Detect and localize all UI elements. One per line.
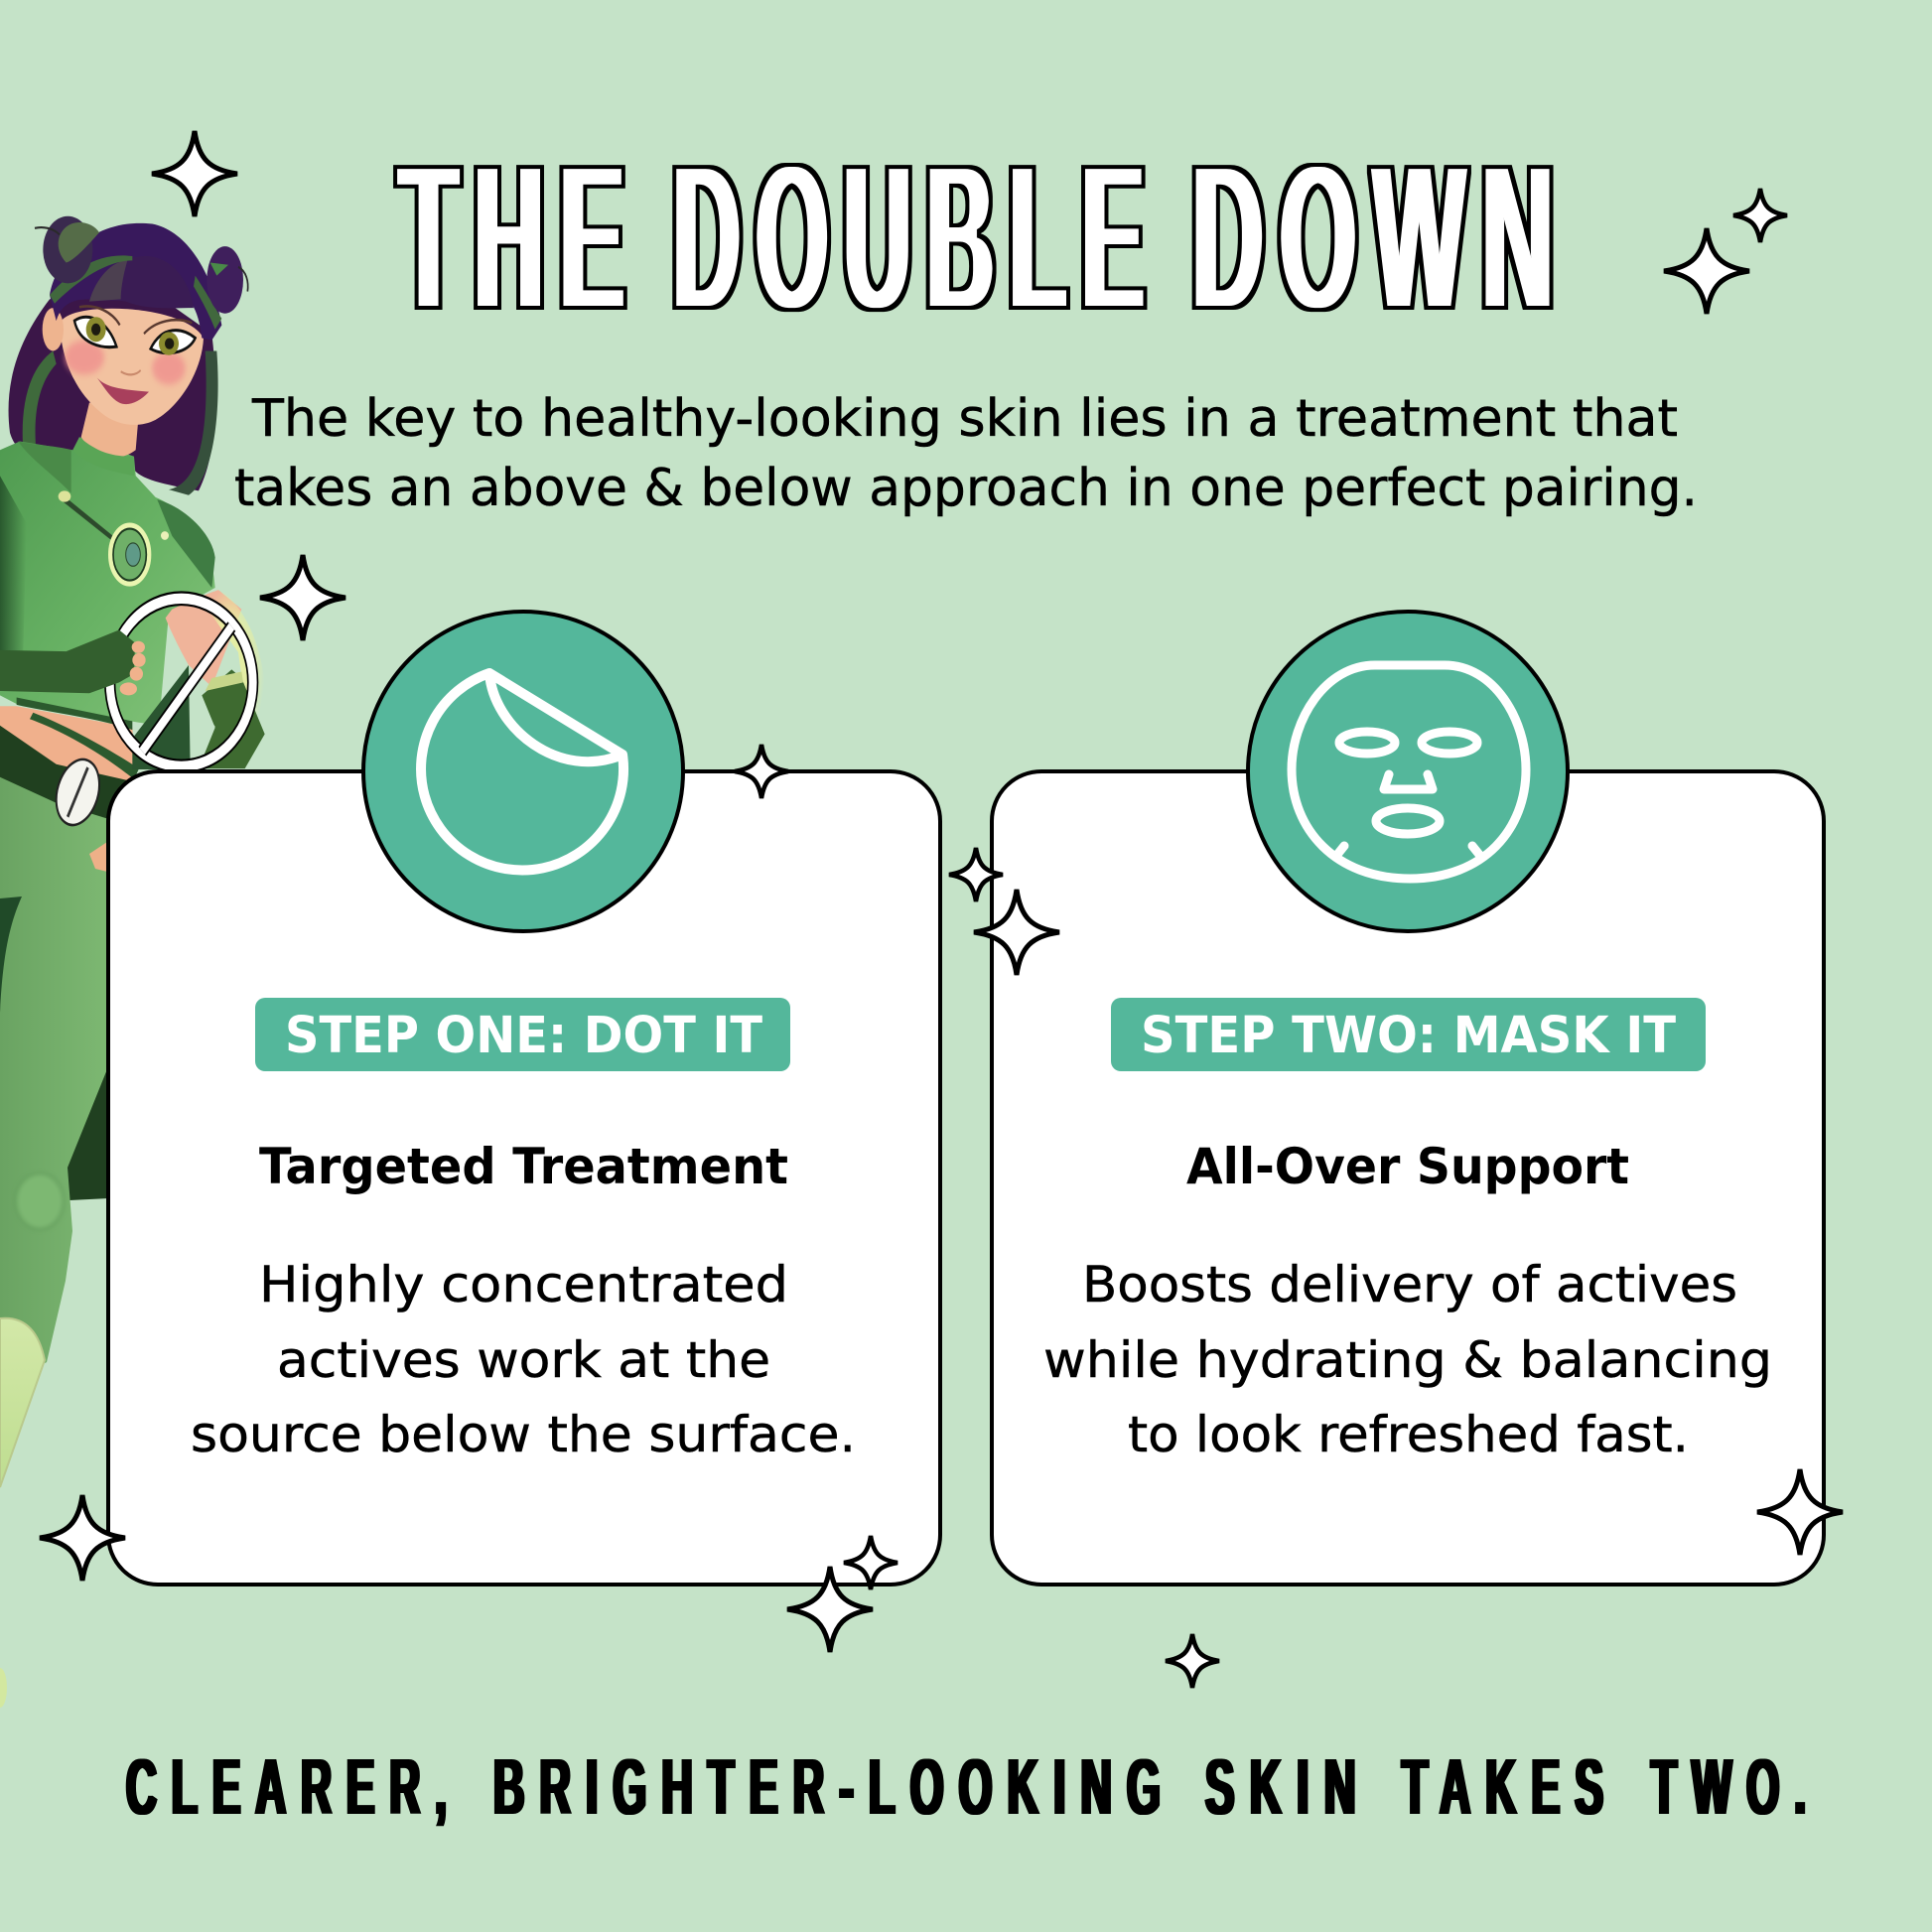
heading: targeted treatment: Targeted Treatment xyxy=(259,1138,788,1195)
upper body, drawn in crop coordinates xyxy=(0,216,265,835)
fringe and top hair xyxy=(50,223,221,341)
cape fold and gap xyxy=(132,665,191,769)
eyes xyxy=(74,317,116,347)
closing tagline: SKIN xyxy=(1205,1742,1371,1831)
title xyxy=(399,119,1570,354)
text: step two description: while hydrating & balancing xyxy=(1043,1331,1772,1389)
midriff and belt xyxy=(0,706,136,811)
title: DOUBLE xyxy=(673,119,1160,354)
closing tagline: CLEARER, xyxy=(126,1742,462,1831)
ring shield xyxy=(110,599,253,766)
text: step two description: to look refreshed fast. xyxy=(1128,1406,1689,1463)
text: step two description: Boosts delivery of actives xyxy=(1082,1256,1737,1313)
panel: step two card xyxy=(992,612,1824,1585)
hair buns xyxy=(43,216,92,283)
far arm xyxy=(166,590,241,687)
near arm and hand xyxy=(0,629,135,693)
closing tagline: BRIGHTER-LOOKING xyxy=(493,1742,1175,1831)
torso xyxy=(0,437,215,726)
hair back xyxy=(9,278,215,490)
neck and face xyxy=(81,402,139,458)
character: green superhero xyxy=(0,216,265,1708)
cape shadow on left xyxy=(0,476,27,652)
icon: sheet face mask xyxy=(1248,612,1568,931)
nose and mouth xyxy=(121,370,141,374)
text: step one description xyxy=(191,1256,856,1463)
intro text: The key to healthy-looking skin lies in a treatment that xyxy=(251,389,1678,449)
closing tagline: TAKES xyxy=(1402,1742,1618,1831)
heading: all-over support: All-Over Support xyxy=(1186,1138,1629,1195)
intro text xyxy=(234,389,1698,518)
step one label: STEP ONE: DOT IT xyxy=(285,1007,762,1065)
text: step two description xyxy=(1043,1256,1772,1463)
panel: step one card xyxy=(108,612,940,1585)
intro text: takes an above & below approach in one perfect pairing. xyxy=(234,459,1698,518)
lower body xyxy=(0,725,124,1708)
text: step one description: Highly concentrated xyxy=(259,1256,788,1313)
text: step one description: actives work at the xyxy=(277,1331,770,1389)
icons: sparkles xyxy=(40,131,1843,1688)
blush xyxy=(65,341,104,374)
step two label: STEP TWO: MASK IT xyxy=(1141,1007,1676,1065)
icon: peeling dot sticker xyxy=(363,612,683,931)
title: THE xyxy=(399,119,640,354)
text: step one description: source below the surface. xyxy=(191,1406,856,1463)
